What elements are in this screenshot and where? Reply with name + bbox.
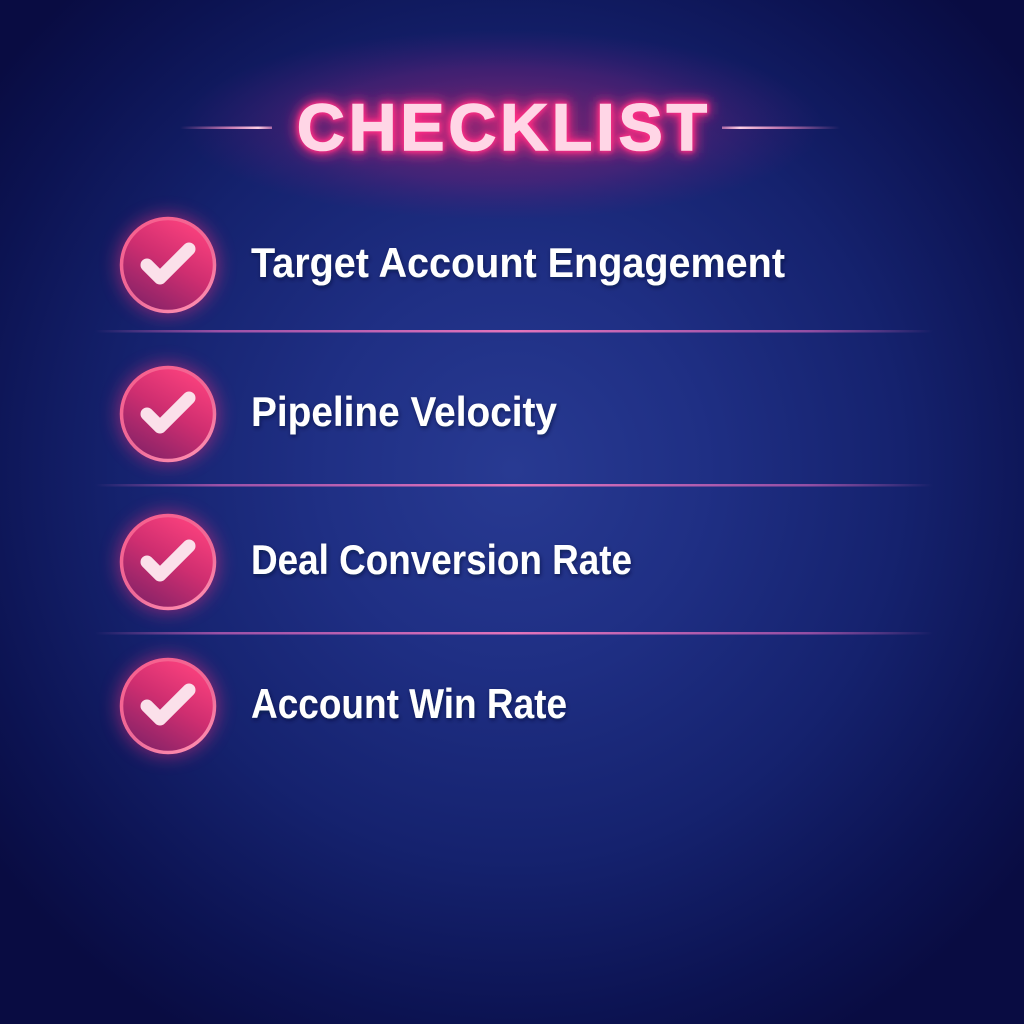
label 2: Pipeline Velocity xyxy=(251,388,558,435)
checklist item 3 xyxy=(118,512,632,612)
label 3: Deal Conversion Rate xyxy=(251,536,632,583)
checklist item 4 xyxy=(118,656,567,756)
divider 1 xyxy=(95,330,933,332)
checklist item 1 xyxy=(118,215,785,315)
title: CHECKLIST xyxy=(297,90,707,164)
label 4: Account Win Rate xyxy=(251,680,567,727)
icon: check badge 4 xyxy=(118,656,218,756)
title: CHECKLIST xyxy=(297,90,707,164)
label 1: Target Account Engagement xyxy=(251,239,785,286)
title: CHECKLIST xyxy=(297,90,707,164)
divider 3 xyxy=(95,632,933,634)
icon: check badge 2 xyxy=(118,364,218,464)
checklist item 2 xyxy=(118,364,558,464)
icon: check badge 3 xyxy=(118,512,218,612)
divider 2 xyxy=(95,484,933,486)
title glow backdrop xyxy=(182,30,822,220)
icon: check badge 1 xyxy=(118,215,218,315)
title flourish: left xyxy=(180,126,272,129)
title flourish: right xyxy=(722,126,840,129)
